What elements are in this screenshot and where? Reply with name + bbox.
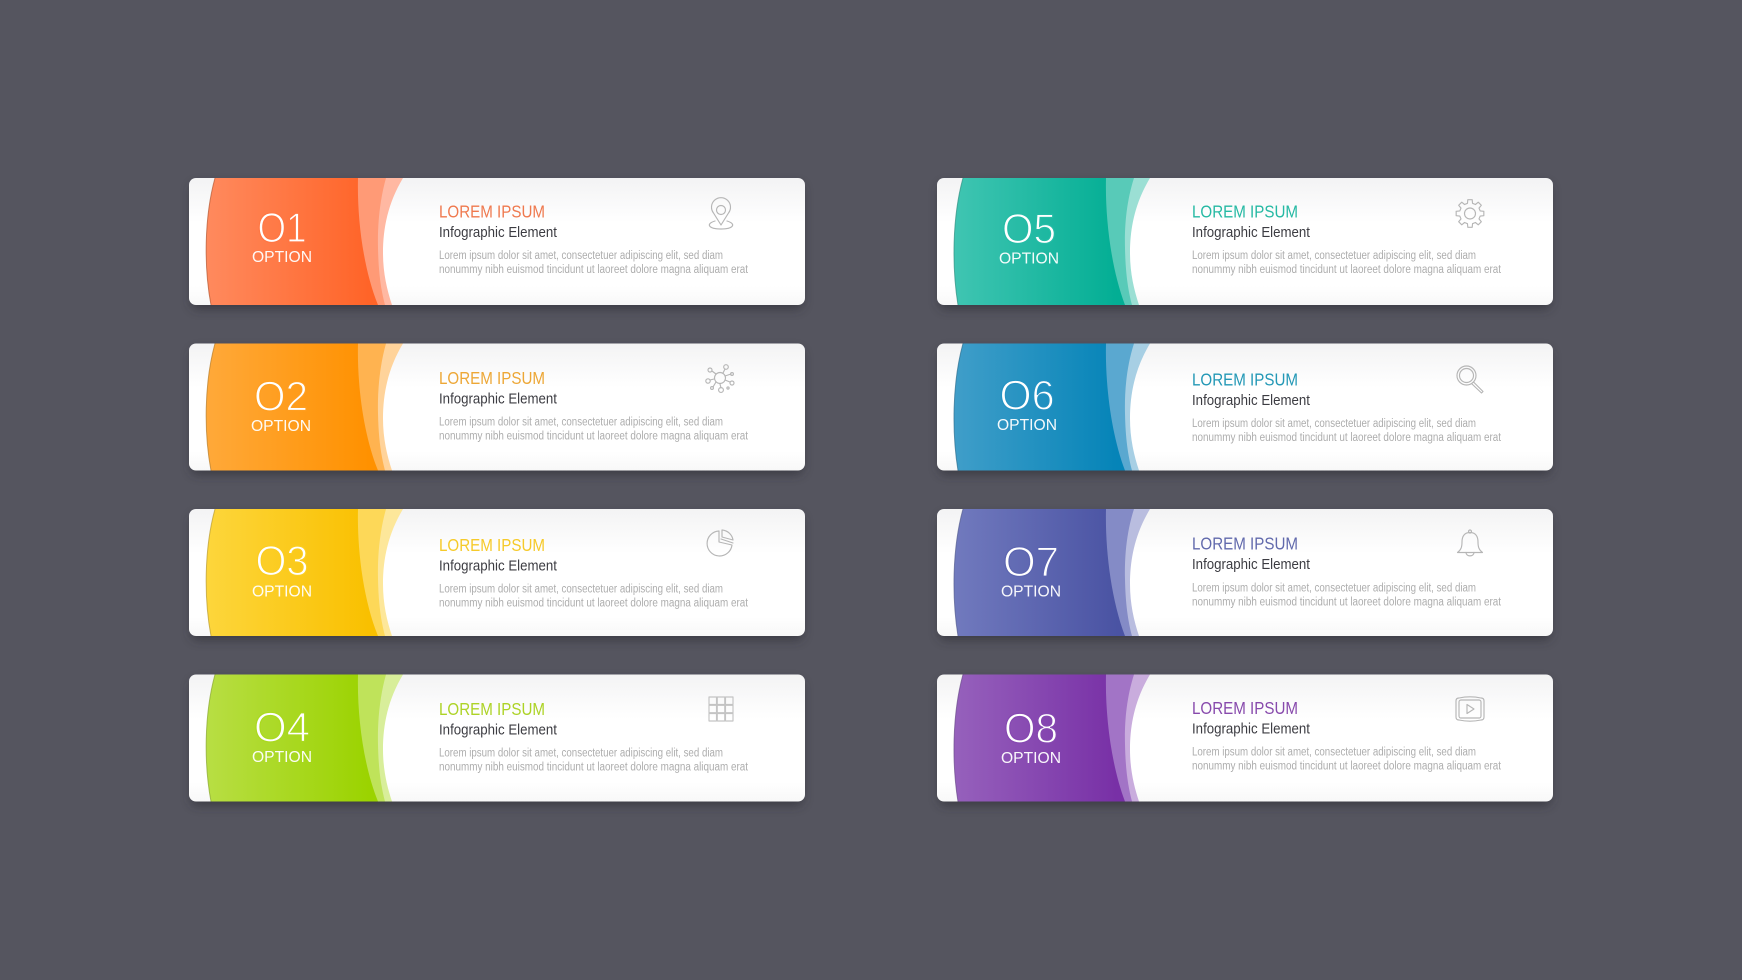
heading: LOREM IPSUM	[1192, 202, 1298, 222]
body text line 2: nonummy nibh euismod tincidunt ut laoreet dolore magna aliquam erat	[439, 597, 749, 609]
body text: Lorem ipsum dolor sit amet, consectetuer adipiscing elit, sed diam	[439, 748, 723, 760]
subheading: Infographic Element	[1192, 224, 1311, 241]
body text: Lorem ipsum dolor sit amet, consectetuer adipiscing elit, sed diam	[439, 417, 723, 429]
body text line 2: nonummy nibh euismod tincidunt ut laoreet dolore magna aliquam erat	[439, 431, 749, 443]
body text line 2: nonummy nibh euismod tincidunt ut laoreet dolore magna aliquam erat	[1192, 761, 1502, 773]
icon: bell	[1458, 530, 1482, 556]
icon: pie chart	[707, 530, 733, 556]
panel: option 01	[189, 178, 805, 309]
number: O6	[1000, 372, 1054, 418]
subheading: Infographic Element	[1192, 392, 1311, 409]
icon: magnifier	[1457, 366, 1483, 393]
option label: OPTION	[997, 417, 1057, 434]
subheading: Infographic Element	[439, 391, 558, 408]
body text line 2: nonummy nibh euismod tincidunt ut laoreet dolore magna aliquam erat	[439, 762, 749, 774]
heading: LOREM IPSUM	[439, 202, 545, 222]
subheading: Infographic Element	[439, 722, 558, 739]
panel: option 05	[937, 178, 1553, 309]
option label: OPTION	[251, 418, 311, 435]
heading: LOREM IPSUM	[439, 368, 545, 388]
option label: OPTION	[1001, 750, 1061, 767]
body text line 2: nonummy nibh euismod tincidunt ut laoreet dolore magna aliquam erat	[1192, 597, 1502, 609]
body text: Lorem ipsum dolor sit amet, consectetuer adipiscing elit, sed diam	[439, 583, 723, 595]
icon: location pin	[709, 198, 733, 229]
icon: gear	[1456, 200, 1484, 227]
subheading: Infographic Element	[1192, 721, 1311, 738]
subheading: Infographic Element	[1192, 556, 1311, 573]
option label: OPTION	[252, 749, 312, 766]
panel: option 04	[189, 674, 805, 806]
body text: Lorem ipsum dolor sit amet, consectetuer adipiscing elit, sed diam	[1192, 583, 1476, 595]
body text: Lorem ipsum dolor sit amet, consectetuer adipiscing elit, sed diam	[1192, 747, 1476, 759]
icon: grid	[709, 697, 733, 721]
heading: LOREM IPSUM	[1192, 698, 1298, 718]
heading: LOREM IPSUM	[1192, 534, 1298, 554]
number: O7	[1003, 538, 1059, 585]
subheading: Infographic Element	[439, 557, 558, 574]
panel: option 08	[937, 674, 1553, 806]
body text: Lorem ipsum dolor sit amet, consectetuer adipiscing elit, sed diam	[439, 250, 723, 262]
panel: option 03	[189, 509, 805, 640]
number: O5	[1002, 205, 1056, 252]
body text: Lorem ipsum dolor sit amet, consectetuer adipiscing elit, sed diam	[1192, 418, 1476, 430]
heading: LOREM IPSUM	[439, 535, 545, 555]
number: O2	[254, 372, 308, 420]
icon: network	[706, 365, 734, 392]
option label: OPTION	[999, 250, 1059, 268]
body text line 2: nonummy nibh euismod tincidunt ut laoreet dolore magna aliquam erat	[1192, 432, 1502, 444]
panel: option 06	[937, 344, 1553, 474]
number: O1	[258, 204, 306, 251]
body text line 2: nonummy nibh euismod tincidunt ut laoreet dolore magna aliquam erat	[1192, 264, 1502, 276]
number: O3	[256, 537, 308, 584]
number: O8	[1004, 704, 1058, 752]
heading: LOREM IPSUM	[1192, 369, 1298, 389]
option label: OPTION	[1001, 584, 1061, 601]
option label: OPTION	[252, 249, 312, 266]
icon: video player	[1456, 697, 1484, 721]
subheading: Infographic Element	[439, 224, 558, 241]
panel: option 07	[937, 509, 1553, 640]
number: O4	[254, 704, 310, 750]
panel: option 02	[189, 344, 805, 474]
option label: OPTION	[252, 584, 312, 601]
heading: LOREM IPSUM	[439, 699, 545, 719]
body text: Lorem ipsum dolor sit amet, consectetuer adipiscing elit, sed diam	[1192, 250, 1476, 262]
body text line 2: nonummy nibh euismod tincidunt ut laoreet dolore magna aliquam erat	[439, 264, 749, 276]
